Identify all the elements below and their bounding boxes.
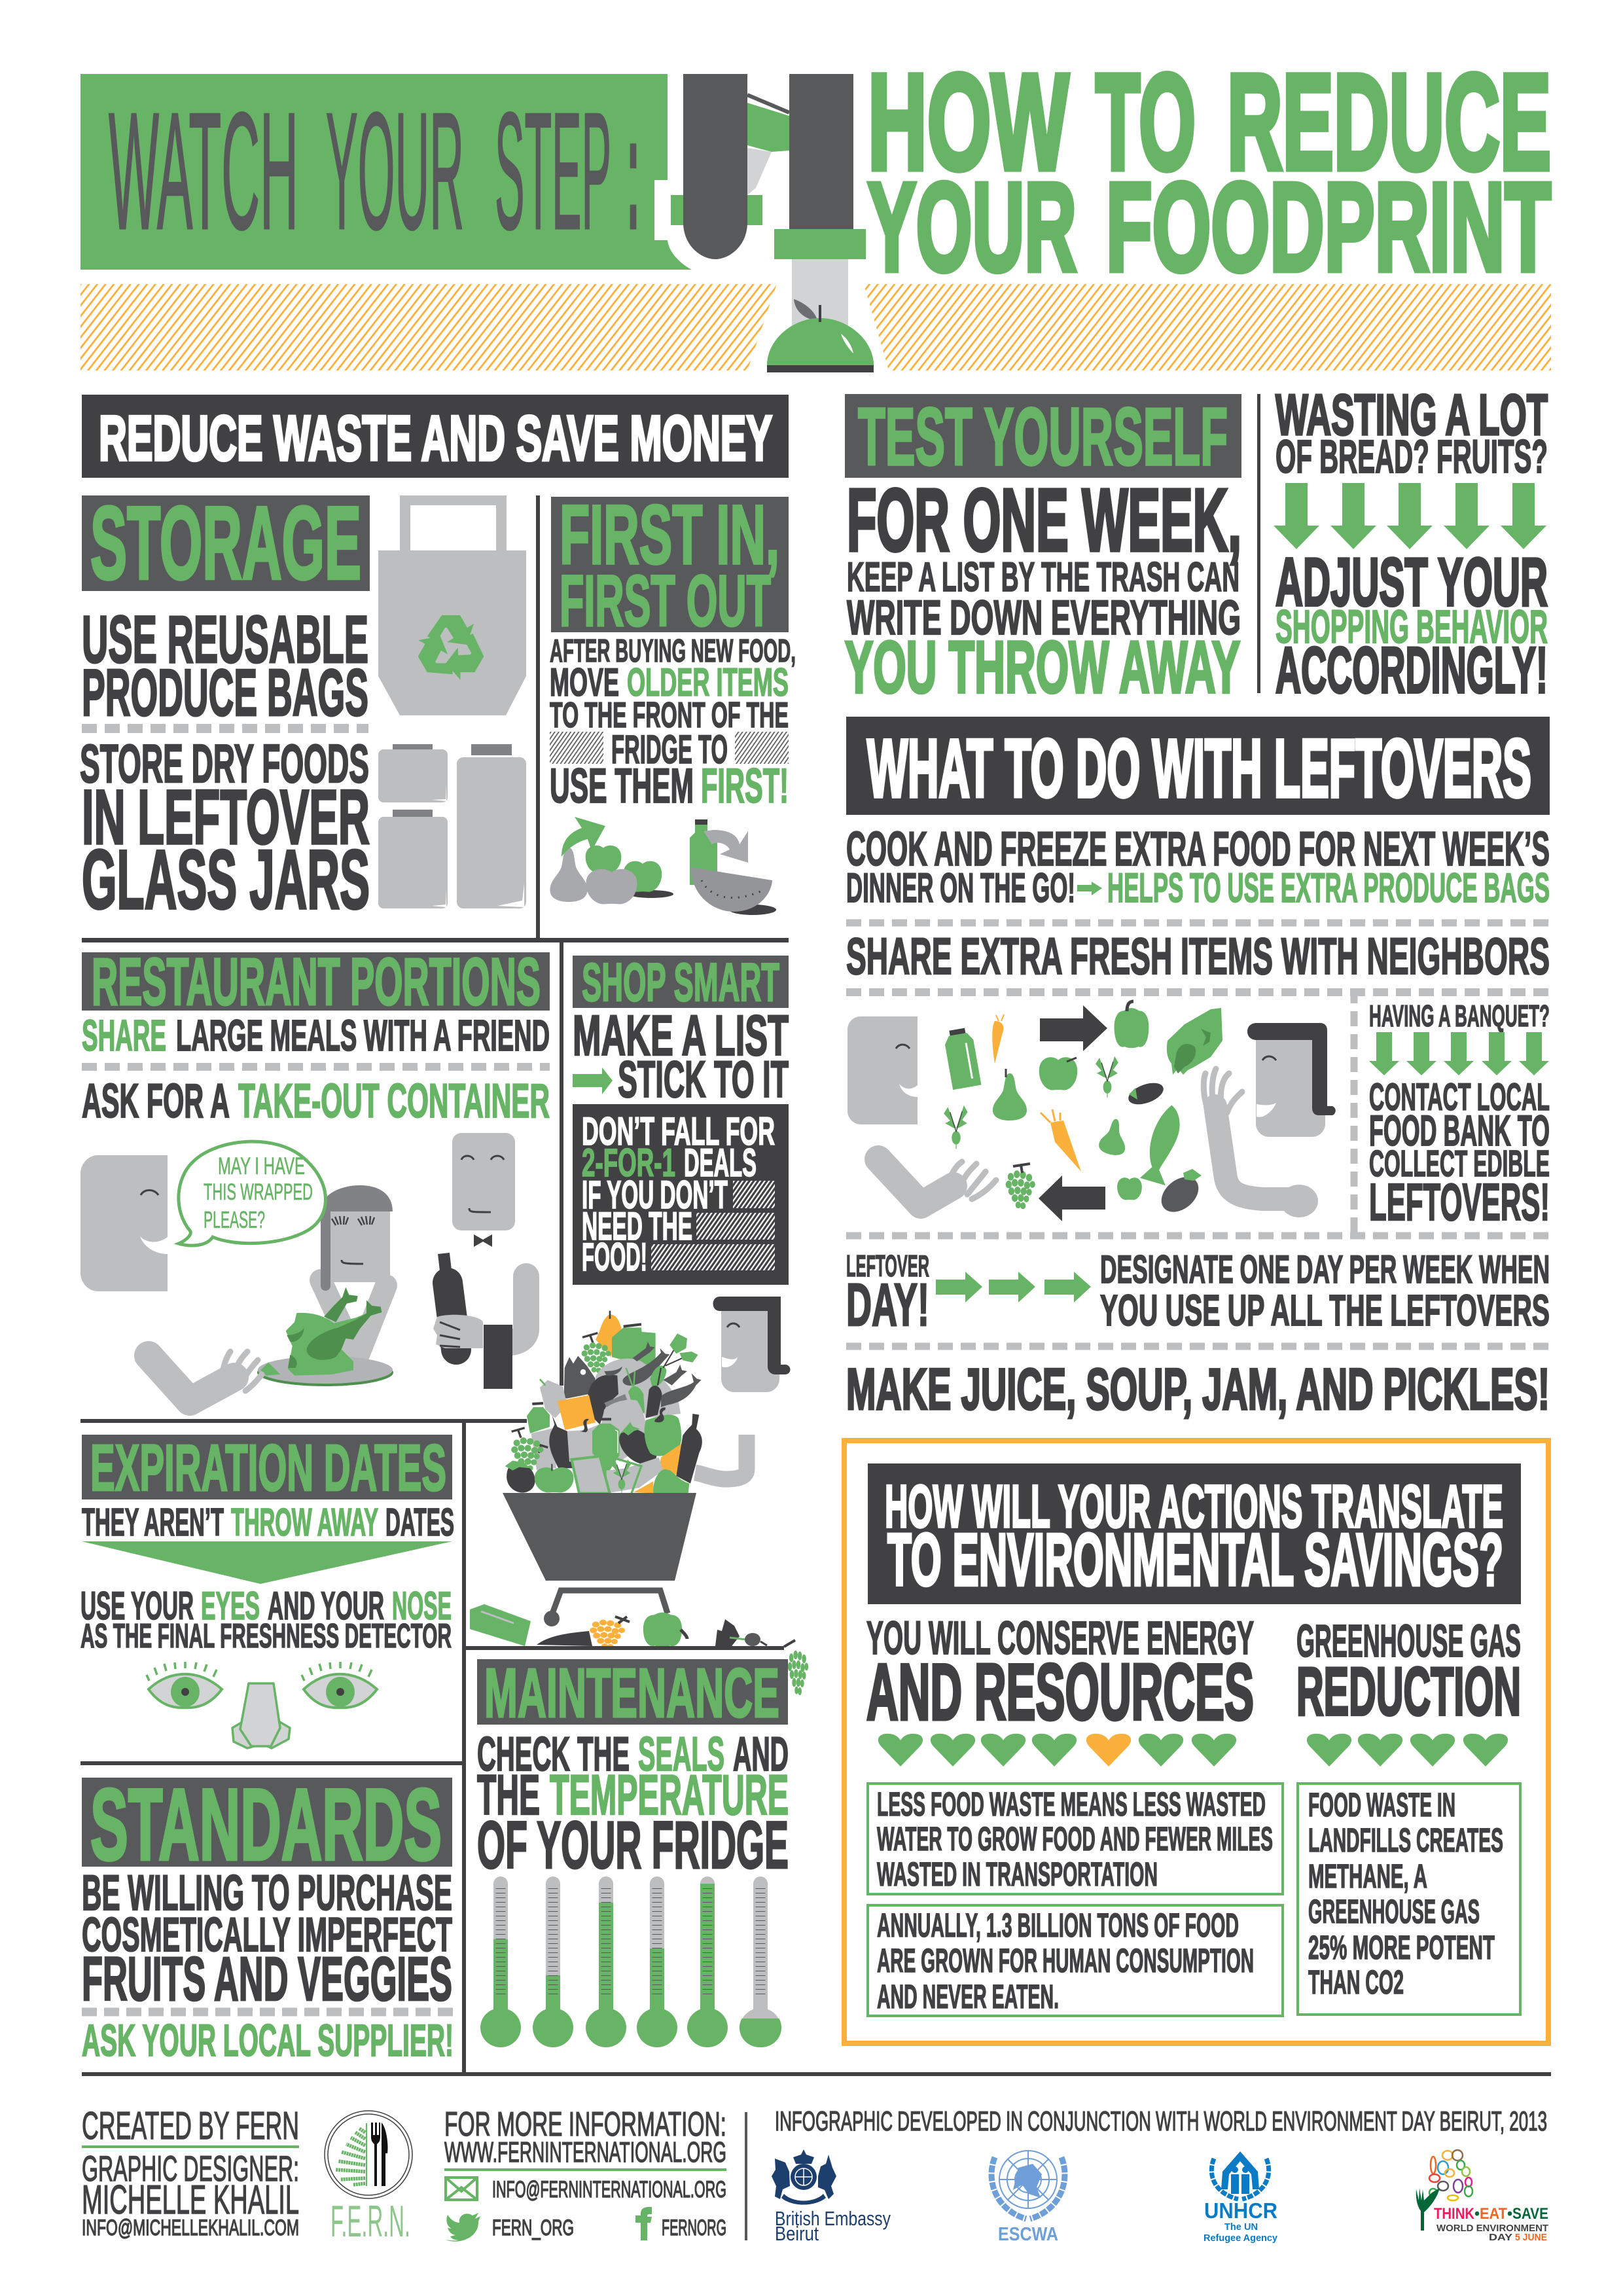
text: contact information: FERN_ORG	[492, 2215, 574, 2240]
illustration: man at restaurant	[80, 1155, 168, 1291]
text: created by fern: MICHELLE KHALIL	[82, 2178, 299, 2223]
arrow: downward triangle	[82, 1541, 452, 1584]
icon: facebook f	[635, 2207, 652, 2240]
arrows: banquet down arrows	[1369, 1032, 1549, 1075]
heading: storage	[82, 486, 370, 601]
icons: seven hearts	[878, 1734, 1236, 1767]
text: be willing to purchase: FRUITS AND VEGGIES	[82, 1945, 452, 2014]
text: check the seals: TEMPERATURE	[550, 1764, 789, 1827]
text: after buying new food: AFTER BUYING NEW FOOD,	[550, 634, 796, 669]
text box: annually 1.3 billion tons: AND NEVER EATEN.	[877, 1978, 1059, 2015]
icons: four hearts	[1307, 1734, 1508, 1767]
title: watch your step: WATCH	[109, 78, 298, 264]
text: use reusable produce bags: USE REUSABLE	[82, 602, 368, 677]
text: share large meals: LARGE MEALS WITH A FRIEND	[176, 1011, 550, 1060]
logo: think eat save: DAY	[1489, 2232, 1512, 2243]
cart basket	[503, 1493, 696, 1581]
text: they aren't throw away dates	[82, 1501, 454, 1544]
cart frame and wheels	[544, 1590, 668, 1626]
heading: restaurant portions	[82, 944, 550, 1019]
banner heading	[868, 1463, 1521, 1604]
footer: credits and sponsors: F.E.R.N.	[330, 2197, 410, 2246]
text: for one week	[845, 471, 1241, 708]
text: store dry foods: STORE DRY FOODS	[80, 733, 369, 794]
illustration: waiter with bottle	[433, 1133, 526, 1389]
text: use your eyes and nose: EYES	[201, 1584, 260, 1628]
illustration: neighbour receiving food	[1204, 1023, 1336, 1217]
text: after buying new food: FIRST!	[701, 759, 789, 813]
text box: annually 1.3 billion tons	[868, 1905, 1283, 2016]
icon: bottle and melon rotated	[690, 819, 776, 915]
icon: fruit rotated forward	[550, 817, 673, 904]
text: use reusable produce bags	[82, 602, 368, 730]
text: contact information: WWW.FERNINTERNATIONAL.ORG	[444, 2136, 726, 2168]
heading: first in first out: FIRST OUT	[560, 561, 771, 641]
thermometer 4	[637, 1876, 677, 2047]
text: created by fern	[82, 2104, 299, 2240]
text: leftover day	[846, 1249, 929, 1338]
logo: fern plate	[325, 2111, 412, 2198]
illustration: shared food items	[943, 1001, 1222, 1219]
callout: 2-for-1 deals: NEED THE	[582, 1204, 692, 1248]
chart: six thermometers	[480, 1876, 781, 2047]
header: title banner: :	[626, 78, 640, 264]
text box: less food waste	[868, 1784, 1283, 1894]
text box: methane	[1298, 1784, 1520, 2015]
panel: restaurant portions	[80, 944, 550, 1401]
text: after buying new food: MOVE	[550, 660, 619, 704]
logo: think eat save: 5 JUNE	[1515, 2232, 1547, 2243]
orange hatch strips	[80, 284, 1551, 370]
text: contact information: FERNORG	[662, 2215, 726, 2240]
heading: first in first out: FIRST IN,	[560, 488, 779, 582]
text: for one week: WRITE DOWN EVERYTHING	[847, 590, 1241, 645]
text: for one week: FOR ONE WEEK,	[847, 471, 1241, 569]
logo: UNHCR: UNHCR	[1204, 2198, 1277, 2223]
text: check the seals: AND	[733, 1728, 789, 1781]
icon: glass jars	[378, 744, 526, 908]
text: store dry foods	[80, 733, 370, 927]
text: greenhouse gas reduction	[1296, 1615, 1521, 1730]
icon: nose	[232, 1683, 290, 1748]
logo: UNHCR	[1204, 2151, 1278, 2244]
text: use your eyes and nose	[80, 1584, 452, 1655]
text: use your eyes and nose: AS THE FINAL FRESHNESS DETECTOR	[80, 1617, 452, 1655]
text: use your eyes and nose: AND YOUR	[268, 1584, 384, 1628]
food pile	[505, 1311, 702, 1494]
logo: think eat save: THINK	[1434, 2205, 1475, 2223]
callout: speech bubble: PLEASE?	[204, 1206, 265, 1233]
text: contact information	[444, 2106, 726, 2240]
text: contact information: FOR MORE INFORMATION:	[444, 2106, 726, 2144]
heading: standards: STANDARDS	[90, 1768, 442, 1881]
icon: twitter bird	[446, 2213, 480, 2242]
panel: standards	[82, 1768, 454, 2066]
heading: expiration dates: EXPIRATION DATES	[90, 1431, 446, 1505]
title: how to reduce your foodprint: YOUR	[868, 156, 1077, 297]
icon: reusable bag	[378, 495, 526, 715]
text: ask for take-out: ASK FOR A	[82, 1075, 230, 1128]
text: use your eyes and nose: USE YOUR	[80, 1584, 194, 1628]
illustration: woman eating chicken	[149, 1185, 393, 1401]
text: share large meals: SHARE	[82, 1011, 166, 1060]
orange frame	[844, 1441, 1548, 2043]
text: ask for take-out	[82, 1075, 550, 1128]
panel: reduce waste and save money	[80, 395, 796, 939]
header: title banner: STEP	[495, 78, 611, 264]
man pushing cart	[695, 1297, 791, 1479]
text: they aren't throw away dates: DATES	[385, 1501, 454, 1544]
text: make a list	[573, 1004, 789, 1108]
heading: maintenance	[477, 1655, 788, 1732]
thermometer 3	[586, 1876, 626, 2047]
text: they aren't throw away dates: THEY AREN’T	[82, 1501, 224, 1544]
icon: right eye	[302, 1662, 377, 1708]
panel: environmental savings	[844, 1441, 1548, 2043]
arrow: dark left arrow	[1039, 1175, 1105, 1221]
illustration: neighbour sharing food	[847, 1016, 996, 1205]
logo: think eat save: EAT	[1480, 2205, 1507, 2223]
text: ask your local supplier: ASK YOUR LOCAL SUPPLIER!	[82, 2015, 454, 2066]
logo: british embassy: British Embassy	[775, 2207, 891, 2230]
title: how to reduce your foodprint	[868, 46, 1551, 297]
callout: 2-for-1 deals: FOOD!	[582, 1235, 647, 1279]
heading: restaurant portions: RESTAURANT PORTIONS	[92, 944, 541, 1019]
text: conserve energy and resources: YOU WILL CONSERVE ENERGY	[866, 1613, 1254, 1664]
text: use reusable produce bags: PRODUCE BAGS	[82, 656, 368, 730]
text box: annually 1.3 billion tons: ANNUALLY, 1.3 BILLION TONS OF FOOD	[877, 1907, 1239, 1944]
text: cook and freeze: DINNER ON THE GO!	[846, 865, 1075, 911]
text: contact information: INFO@FERNINTERNATIONAL.ORG	[492, 2177, 726, 2202]
text: conserve energy and resources: AND RESOURCES	[866, 1647, 1254, 1736]
heading: expiration dates	[82, 1431, 452, 1505]
text: after buying new food: OLDER ITEMS	[627, 660, 789, 704]
panel: test yourself	[845, 382, 1548, 708]
title: how to reduce your foodprint: TO	[1096, 46, 1196, 198]
heading: first in first out	[551, 488, 789, 641]
panel: expiration dates	[80, 1431, 454, 1748]
text: for one week: KEEP A LIST BY THE TRASH CAN	[847, 554, 1240, 600]
text: contact local food bank	[1369, 1076, 1550, 1231]
arrows: three right arrows	[936, 1272, 1091, 1302]
text: store dry foods: IN LEFTOVER	[82, 774, 370, 861]
header green panel	[80, 74, 692, 270]
text: created by fern: GRAPHIC DESIGNER:	[82, 2148, 299, 2189]
panel: what to do with leftovers	[846, 717, 1550, 1422]
icon: squashed apple	[767, 299, 874, 372]
icon: giant leg stepping on apple	[671, 74, 866, 331]
heading: shop smart: SHOP SMART	[582, 952, 779, 1013]
thermometer 1	[480, 1876, 521, 2047]
text box: methane: FOOD WASTE IN	[1308, 1786, 1455, 1823]
heading: standards	[82, 1768, 452, 1881]
text: after buying new food	[550, 634, 796, 813]
heading: maintenance: MAINTENANCE	[484, 1655, 779, 1732]
logo: think eat save: •	[1507, 2205, 1512, 2223]
text box: methane: THAN CO2	[1308, 1964, 1404, 2001]
logo: think eat save: WORLD ENVIRONMENT	[1436, 2223, 1548, 2234]
callout: speech bubble	[179, 1141, 326, 1246]
logo: british embassy: Beirut	[775, 2222, 819, 2245]
callout: 2-for-1 deals: IF YOU DON’T	[582, 1173, 728, 1217]
footer: credits and sponsors	[82, 2104, 1548, 2246]
callout: 2-for-1 deals: DON’T FALL FOR	[582, 1109, 775, 1153]
logo: think eat save: •	[1474, 2205, 1480, 2223]
text box: methane: METHANE, A	[1308, 1857, 1427, 1895]
illustration: overflowing shopping cart	[466, 1297, 808, 1695]
spilled food on shelf	[466, 1604, 808, 1695]
panel: maintenance	[477, 1655, 789, 2047]
text: check the seals: SEALS	[638, 1728, 724, 1781]
text box: less food waste: WASTED IN TRANSPORTATION	[877, 1856, 1158, 1893]
heading: shop smart	[573, 952, 789, 1013]
text: leftover day: LEFTOVER	[846, 1249, 929, 1283]
text: share large meals	[82, 1011, 550, 1060]
callout: speech bubble: MAY I HAVE	[218, 1153, 305, 1179]
heading: test yourself	[845, 392, 1241, 482]
text: created by fern: CREATED BY FERN	[82, 2104, 299, 2147]
logo: ESCWA UN emblem: ESCWA	[998, 2224, 1058, 2245]
text: make a list: MAKE A LIST	[573, 1004, 789, 1067]
text: be willing to purchase	[82, 1865, 452, 2014]
title: watch your step: YOUR	[326, 78, 464, 264]
logo: think eat save	[1416, 2150, 1548, 2243]
text: make a list: STICK TO IT	[618, 1050, 789, 1108]
text: store dry foods: GLASS JARS	[82, 833, 370, 927]
text: check the seals: CHECK THE	[477, 1728, 630, 1781]
logo: UNHCR: Refugee Agency	[1204, 2233, 1278, 2244]
title: how to reduce your foodprint: HOW	[868, 46, 1069, 198]
header: title banner	[80, 46, 1551, 372]
logo: ESCWA UN emblem	[991, 2151, 1065, 2245]
text: designate one day	[1100, 1247, 1550, 1335]
text: use your eyes and nose: NOSE	[392, 1584, 452, 1628]
logo: british embassy	[772, 2149, 891, 2245]
text: check the seals: THE	[477, 1764, 540, 1827]
text: check the seals: OF YOUR FRIDGE	[477, 1808, 789, 1882]
text: ask for take-out: TAKE-OUT CONTAINER	[238, 1075, 550, 1128]
text: be willing to purchase: COSMETICALLY IMPERFECT	[82, 1909, 452, 1962]
logo: think eat save: SAVE	[1512, 2205, 1548, 2223]
thermometer 5	[687, 1876, 728, 2047]
text: after buying new food: FRIDGE TO	[611, 727, 728, 772]
thermometer 2	[533, 1876, 573, 2047]
panel: shop smart	[573, 952, 789, 1285]
text: after buying new food: USE THEM	[550, 759, 694, 813]
text: adjust your shopping behavior	[1275, 545, 1548, 706]
heading: test yourself: TEST YOURSELF	[858, 392, 1228, 482]
callout: speech bubble: THIS WRAPPED	[204, 1179, 313, 1205]
text box: less food waste: WATER TO GROW FOOD AND FEWER MILES	[877, 1820, 1273, 1857]
callout: 2-for-1 deals: 2-FOR-1	[582, 1141, 675, 1185]
callout: 2-for-1 deals: DEALS	[684, 1141, 757, 1185]
arrow: dark right arrow	[1040, 1005, 1107, 1051]
text: wasting a lot	[1275, 382, 1548, 483]
text: check the seals	[477, 1728, 789, 1882]
text: created by fern: INFO@MICHELLEKHALIL.COM	[82, 2215, 299, 2240]
text: after buying new food: TO THE FRONT OF THE	[550, 694, 789, 735]
logo: UNHCR: The UN	[1224, 2221, 1258, 2233]
text: conserve energy and resources	[866, 1613, 1254, 1736]
text: they aren't throw away dates: THROW AWAY	[231, 1501, 378, 1544]
heading: storage: STORAGE	[90, 486, 361, 601]
text: be willing to purchase: BE WILLING TO PURCHASE	[82, 1865, 452, 1921]
banner heading: REDUCE WASTE AND SAVE MONEY	[99, 403, 772, 474]
text box: less food waste: LESS FOOD WASTE MEANS LESS WASTED	[877, 1785, 1266, 1823]
text: for one week: YOU THROW AWAY	[845, 626, 1240, 708]
text: leftover day: DAY!	[846, 1272, 929, 1338]
text box: methane: 25% MORE POTENT	[1308, 1929, 1495, 1966]
text box: methane: GREENHOUSE GAS	[1308, 1893, 1480, 1930]
callout: 2-for-1 deals	[573, 1104, 789, 1285]
icon: left eye	[147, 1662, 222, 1708]
text: cook and freeze	[846, 823, 1550, 911]
text box: annually 1.3 billion tons: ARE GROWN FOR HUMAN CONSUMPTION	[877, 1942, 1254, 1979]
arrows: five down arrows	[1274, 483, 1546, 549]
icon: envelope	[446, 2178, 477, 2200]
thermometer 6	[740, 1876, 781, 2047]
banner heading	[82, 395, 789, 478]
